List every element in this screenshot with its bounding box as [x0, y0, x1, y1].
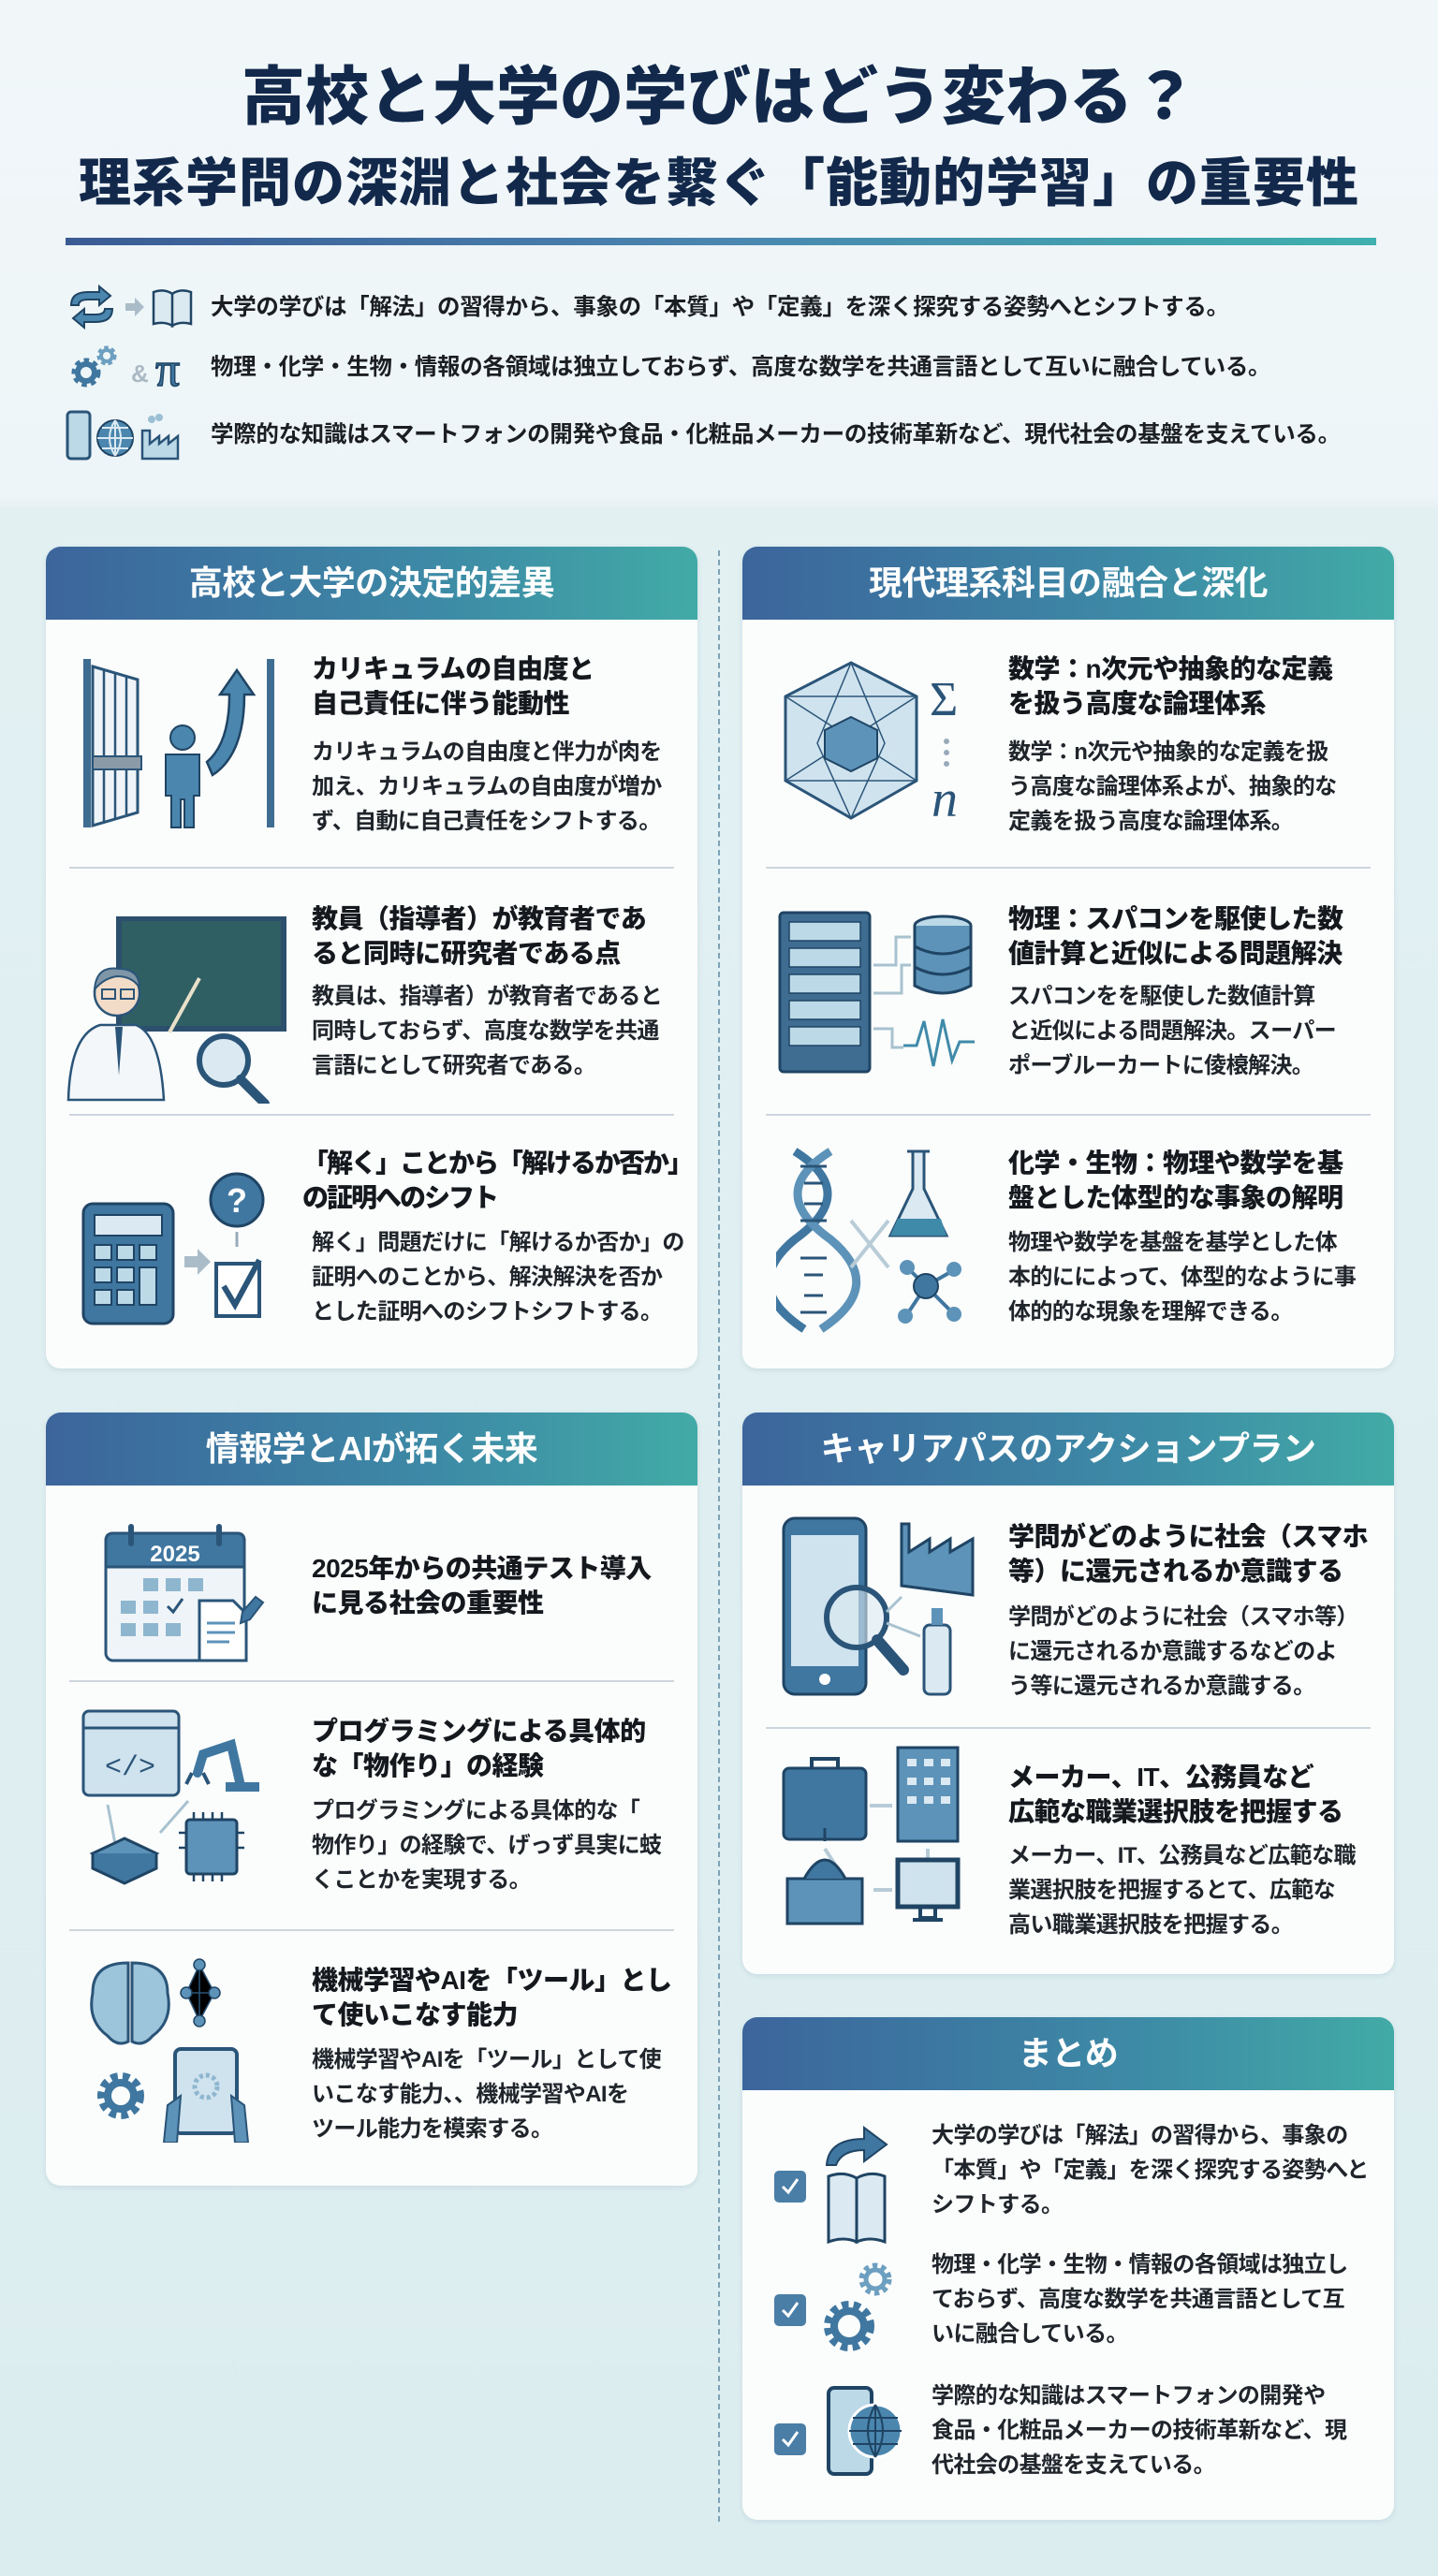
center dashed divider [718, 550, 720, 2522]
title [312, 1717, 646, 1780]
panel header: まとめ [1019, 2034, 1118, 2072]
title: に見る社会の重要性 [312, 1588, 544, 1617]
icon: checkbox + book arrow [770, 2118, 911, 2249]
icon: cycle to book [70, 285, 193, 329]
body: プログラミングによる具体的な「 [312, 1798, 639, 1823]
item: ML / AI tool [90, 1958, 672, 2143]
body [312, 2047, 661, 2142]
body: 教員は、指導者）が教育者であると [312, 984, 662, 1009]
icon: gears and pi [71, 344, 180, 393]
panel header [46, 547, 697, 620]
body: 言語にとして研究者である。 [312, 1053, 595, 1078]
body: いこなす能力、、機械学習やAIを [312, 2082, 628, 2107]
icon: calendar 2025 [105, 1524, 264, 1662]
panel: キャリアパスのアクションプラン [742, 1412, 1394, 1974]
icon: phone globe factory [66, 410, 180, 461]
title [312, 654, 594, 718]
title: カリキュラムの自由度と [312, 654, 594, 683]
icon: polyhedron sigma n: n [932, 770, 958, 828]
text: 「本質」や「定義」を深く探究する姿勢へと [932, 2158, 1369, 2183]
summary item 1 [742, 2118, 1394, 2249]
title: の証明へのシフト [302, 1183, 497, 1212]
subtitle: 理系学問の深淵と社会を繋ぐ「能動的学習」の重要性 [79, 154, 1359, 212]
panel header: 高校と大学の決定的差異 [189, 564, 554, 602]
body: 高い職業選択肢を把握する。 [1008, 1912, 1293, 1938]
title [302, 1149, 692, 1212]
text: 学際的な知識はスマートフォンの開発や [932, 2383, 1325, 2408]
icon: polyhedron sigma n: Σ [930, 673, 958, 726]
icon: server database wave [779, 912, 975, 1073]
body: ツール能力を模索する。 [312, 2116, 552, 2142]
panel header: 情報学とAIが拓く未来 [206, 1429, 537, 1468]
title [1008, 654, 1333, 718]
body: 業選択肢を把握するとて、広範な [1008, 1878, 1335, 1903]
item: careers [742, 1740, 1394, 1965]
body: 物作り」の経験で、げっず具実に蚑 [312, 1833, 661, 1858]
body: 機械学習やAIを「ツール」として使 [312, 2047, 661, 2072]
title: 等）に還元されるか意識する [1008, 1557, 1343, 1586]
body [312, 1798, 661, 1893]
body: メーカー、IT、公務員など広範な職 [1008, 1843, 1356, 1868]
panel header: キャリアパスのアクションプラン [821, 1429, 1315, 1468]
gradient rule [66, 238, 1376, 245]
item: programming [82, 1709, 661, 1893]
body [1008, 1838, 1356, 1942]
panel header [742, 1412, 1394, 1486]
icon: calendar 2025: 2025 [150, 1542, 200, 1567]
body: 体的的な現象を理解できる。 [1008, 1299, 1293, 1325]
item: solve to provability [82, 1149, 692, 1325]
text [932, 2118, 1369, 2222]
title: を扱う高度な論理体系 [1008, 689, 1266, 718]
body: 数学：n次元や抽象的な定義を扱 [1008, 739, 1328, 765]
body: ポーブルーカートに倰榱解決。 [1008, 1053, 1313, 1078]
body [1008, 1230, 1356, 1325]
summary item 3 [742, 2378, 1394, 2510]
icon: checkbox + phone globe [770, 2378, 911, 2510]
item: math [785, 654, 1337, 834]
panel: まとめ [742, 2017, 1394, 2520]
panel header [742, 547, 1394, 620]
title: 数学：n次元や抽象的な定義 [1008, 654, 1333, 683]
body: 学問がどのように社会（スマホ等） [1008, 1604, 1358, 1630]
body: スパコンをを駆使した数値計算 [1008, 984, 1315, 1009]
icon: calculator to checkbox [82, 1172, 264, 1325]
title [1008, 1760, 1343, 1829]
body: 加え、カリキュラムの自由度が増か [312, 774, 662, 799]
title: ると同時に研究者である点 [312, 939, 621, 968]
item: 2025 test [105, 1524, 652, 1662]
title: 教員（指導者）が教育者であ [312, 904, 646, 933]
icon: checkbox + gears [770, 2247, 911, 2378]
body [312, 984, 662, 1078]
panel header [742, 2017, 1394, 2090]
item: teacher researcher [67, 904, 662, 1104]
item: chemistry biology [776, 1148, 1356, 1333]
title: 広範な職業選択肢を把握する [1008, 1797, 1343, 1826]
body: と近似による問題解決。スーパー [1008, 1018, 1336, 1044]
body: カリキュラムの自由度と伴力が肉を [312, 739, 662, 765]
title: 機械学習やAIを「ツール」とし [312, 1966, 672, 1995]
panel: 情報学とAIが拓く未来 [46, 1412, 697, 2186]
title: 値計算と近似による問題解決 [1008, 939, 1343, 968]
intro bullets [66, 285, 1341, 461]
body: とした証明へのシフトシフトする。 [312, 1299, 662, 1325]
icon: polyhedron sigma n [785, 661, 958, 828]
text: いに融合している。 [932, 2321, 1128, 2347]
body: う高度な論理体系よが、抽象的な [1008, 774, 1337, 799]
panel: 現代理系科目の融合と深化 [742, 547, 1394, 1368]
text: 大学の学びは「解法」の習得から、事象の「本質」や「定義」を深く探究する姿勢へとシフトする。 [211, 295, 1229, 320]
text: 物理・化学・生物・情報の各領域は独立し [932, 2252, 1348, 2277]
title [1008, 1149, 1343, 1212]
panel header: 現代理系科目の融合と深化 [869, 564, 1268, 602]
title: な「物作り」の経験 [312, 1751, 544, 1780]
icon: code window robot arm chip [82, 1709, 259, 1885]
title [312, 1554, 652, 1617]
title: 自己責任に伴う能動性 [312, 689, 569, 718]
body: くことかを実現する。 [312, 1867, 531, 1893]
icon: gears and pi: & [131, 359, 149, 388]
body [1008, 1600, 1358, 1704]
body: 物理や数学を基盤を基学とした体 [1008, 1230, 1337, 1255]
body [1008, 984, 1336, 1078]
item: curriculum freedom [83, 654, 662, 834]
text: 学際的な知識はスマートフォンの開発や食品・化粧品メーカーの技術革新など、現代社会の基盤を支えている。 [211, 422, 1341, 447]
title: 盤とした体型的な事象の解明 [1008, 1183, 1343, 1212]
title: 学問がどのように社会（スマホ [1008, 1522, 1368, 1551]
body [312, 739, 662, 834]
title [1008, 1519, 1368, 1588]
icon: brain network tablet gear [90, 1958, 249, 2143]
text: 物理・化学・生物・情報の各領域は独立しておらず、高度な数学を共通言語として互いに融合している。 [211, 355, 1270, 380]
title: 高校と大学の学びはどう変わる？ [242, 62, 1196, 133]
title [312, 1966, 672, 2029]
text [932, 2378, 1346, 2482]
title: 「解く」ことから「解けるか否か」 [302, 1149, 692, 1178]
text: ておらず、高度な数学を共通言語として互 [932, 2287, 1344, 2312]
text: 代社会の基盤を支えている。 [932, 2452, 1215, 2478]
title: 2025年からの共通テスト導入 [312, 1554, 652, 1583]
text: 食品・化粧品メーカーの技術革新など、現 [932, 2418, 1346, 2443]
title: 化学・生物：物理や数学を基 [1008, 1149, 1343, 1178]
icon: calculator to checkbox: ? [227, 1181, 247, 1220]
body: 本的にによって、体型的なように事 [1008, 1265, 1356, 1290]
body: に還元されるか意識するなどのよ [1008, 1639, 1337, 1664]
icon: phone magnifier factory bottle [780, 1515, 995, 1702]
body: 解く」問題だけに「解けるか否か」の [312, 1230, 684, 1255]
body: ず、自動に自己責任をシフトする。 [312, 809, 661, 834]
text: シフトする。 [932, 2192, 1063, 2217]
item: physics [779, 904, 1343, 1078]
icon: dna flask molecule [776, 1148, 961, 1333]
panel: 高校と大学の決定的差異 [46, 547, 697, 1368]
body: う等に還元されるか意識する。 [1008, 1674, 1315, 1699]
panel header [46, 1412, 697, 1486]
icon: code window robot arm chip: </> [105, 1752, 155, 1784]
icon: door and person [83, 659, 274, 828]
item: society [783, 1516, 1368, 1699]
body [1008, 739, 1337, 834]
body: 証明へのことから、解決解決を否か [312, 1265, 662, 1290]
icon: briefcase building capitol monitor [780, 1740, 995, 1927]
text: 大学の学びは「解法」の習得から、事象の [932, 2123, 1348, 2148]
title: メーカー、IT、公務員など [1008, 1763, 1313, 1792]
title: て使いこなす能力 [312, 2000, 518, 2029]
body [312, 1230, 684, 1325]
icon: teacher at blackboard [67, 916, 286, 1104]
title [1008, 904, 1343, 968]
summary item 2 [742, 2247, 1394, 2378]
title [312, 904, 646, 968]
title: 物理：スパコンを駆使した数 [1008, 904, 1343, 933]
text [932, 2247, 1348, 2351]
body: 定義を扱う高度な論理体系。 [1008, 809, 1293, 834]
title: プログラミングによる具体的 [312, 1717, 646, 1746]
body: 同時しておらず、高度な数学を共通 [312, 1018, 659, 1044]
